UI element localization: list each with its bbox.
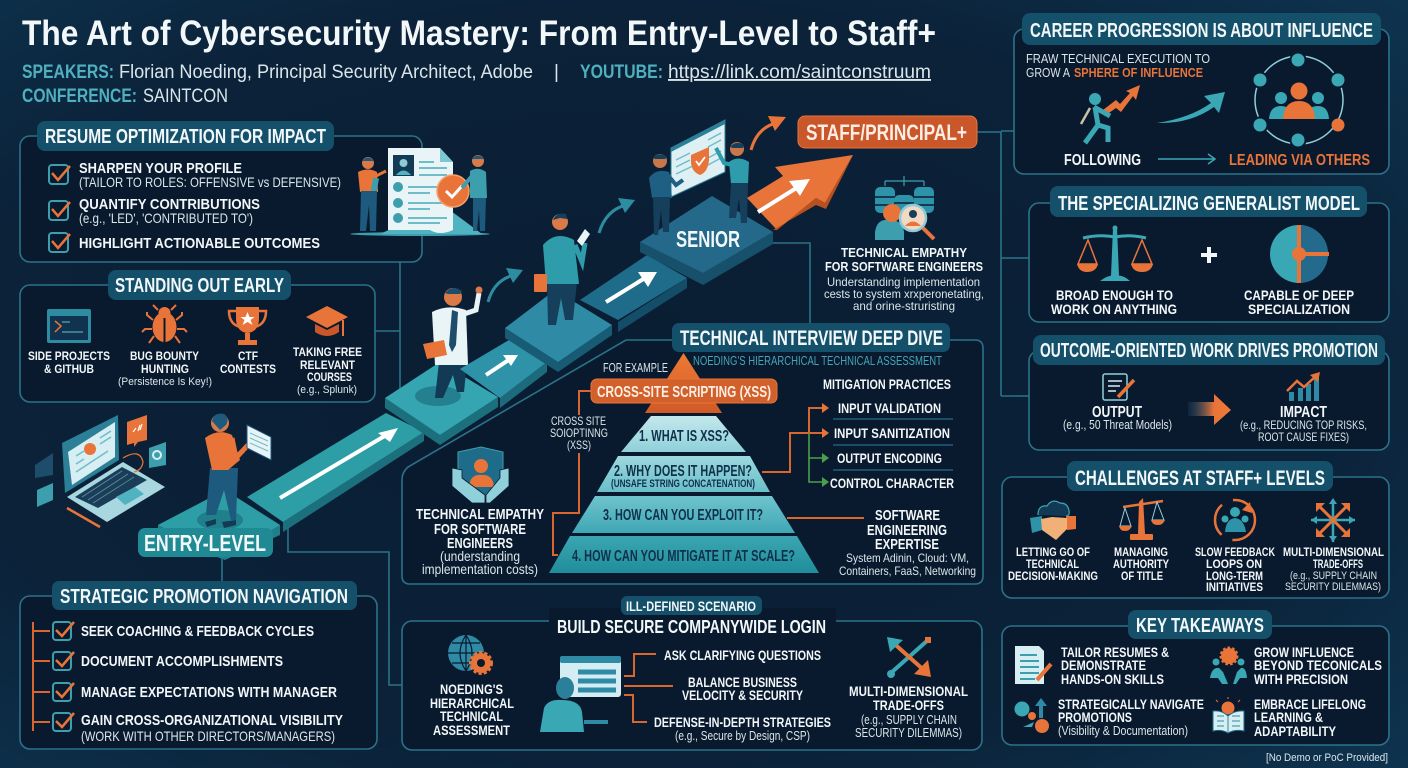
label: managing authority: MANAGING: [1114, 547, 1168, 559]
figure: engineer with tablet: [534, 214, 590, 325]
panel: challenges at staff+ levels: [1002, 461, 1389, 598]
career intro text: FRAW TECHNICAL EXECUTION TO: [1026, 51, 1210, 66]
text: output: [1063, 404, 1172, 432]
panel: key takeaways: KEY TAKEAWAYS: [1136, 615, 1264, 637]
promotion list text: (WORK WITH OTHER DIRECTORS/MANAGERS): [81, 728, 335, 744]
speakers and link line: YOUTUBE:: [580, 62, 663, 83]
label: staff/principal: [798, 116, 977, 148]
resume checklist: [49, 160, 341, 252]
text: technical empathy upper: Understanding implementation: [827, 275, 980, 289]
big orange arrow: [747, 155, 853, 230]
scenario heading: BUILD SECURE COMPANYWIDE LOGIN: [557, 617, 826, 637]
resume checklist: HIGHLIGHT ACTIONABLE OUTCOMES: [79, 235, 320, 252]
free courses label: [293, 345, 362, 396]
text: impact: IMPACT: [1280, 404, 1327, 421]
text: navigate promotions: STRATEGICALLY NAVIGATE: [1058, 696, 1204, 712]
label: managing authority: [1113, 547, 1169, 583]
label: letting go: TECHNICAL: [1026, 559, 1079, 571]
resume checklist: QUANTIFY CONTRIBUTIONS: [79, 196, 260, 213]
free courses label: (e.g., Splunk): [297, 384, 357, 396]
pyramid: (UNSAFE STRING CONCATENATION): [611, 478, 755, 490]
promotion list text: SEEK COACHING & FEEDBACK CYCLES: [81, 623, 314, 640]
pyramid: 4. HOW CAN YOU MITIGATE IT AT SCALE?: [572, 548, 795, 565]
scenario steps text: [654, 647, 831, 743]
label: managing authority: AUTHORITY: [1113, 559, 1169, 571]
icon: tilted scale: [1119, 498, 1165, 540]
text: output: OUTPUT: [1092, 404, 1142, 421]
free courses label: COURSES: [307, 370, 352, 384]
icon: climbing figure: [1081, 85, 1140, 143]
text: navigate promotions: [1058, 696, 1204, 738]
side projects label: SIDE PROJECTS: [28, 349, 110, 363]
badge: cross-site scripting: CROSS-SITE SCRIPTING (XSS): [597, 384, 771, 401]
badge: ill-defined scenario: ILL-DEFINED SCENARIO: [626, 598, 756, 614]
promotion tree connector: [33, 622, 50, 731]
panel: technical interview deep dive: [402, 323, 983, 584]
label: trade-offs: [1283, 547, 1384, 593]
text: software engineering expertise: Containers, FaaS, Networking: [839, 564, 976, 578]
pathway slab 3: [580, 255, 687, 332]
figure: engineer in white shirt: [423, 286, 482, 398]
icon: handshake with cloud: [1030, 501, 1076, 540]
ctf label: [220, 349, 276, 376]
text: lifelong learning: ADAPTABILITY: [1254, 723, 1337, 739]
title: The Art of Cybersecurity Mastery: From Entry-Level to Staff+: [22, 14, 936, 53]
speakers and link line: [22, 62, 931, 83]
text: software engineering expertise: SOFTWARE: [875, 507, 940, 524]
text: technical empathy upper: cests to system xrxperonetating,: [824, 287, 984, 301]
icon: crossing arrows: [887, 637, 931, 678]
icon: specialization circle: [1270, 225, 1329, 283]
ctf label: CONTESTS: [220, 362, 276, 376]
text: lifelong learning: [1254, 696, 1366, 739]
speakers and link line: |: [554, 62, 559, 83]
icon: terminal window: [47, 309, 91, 343]
text: grow influence: [1254, 644, 1382, 687]
panel: key takeaways: [1002, 610, 1389, 745]
scenario steps text: DEFENSE-IN-DEPTH STRATEGIES: [654, 714, 831, 730]
bug bounty label: HUNTING: [141, 362, 189, 376]
icon: resume with reviewers: [350, 148, 490, 236]
label: managing authority: OF TITLE: [1121, 571, 1163, 583]
label: trade-offs: SECURITY DILEMMAS): [1285, 581, 1381, 593]
senior platform and figures: [640, 120, 773, 285]
label: deep specialization: SPECIALIZATION: [1248, 301, 1350, 317]
arrow: output to impact: [1188, 394, 1231, 425]
text: grow influence: GROW INFLUENCE: [1254, 644, 1354, 660]
badge: cross-site scripting: [591, 379, 777, 403]
label: slow feedback: [1195, 547, 1276, 594]
panel: standing out early: [20, 270, 375, 402]
label: slow feedback: SLOW FEEDBACK: [1195, 547, 1276, 559]
text: technical empathy lower: (understanding: [440, 548, 520, 564]
panel: resume optimization: RESUME OPTIMIZATION FOR IMPACT: [45, 126, 326, 148]
career intro text: SPHERE OF INFLUENCE: [1074, 65, 1203, 80]
text: lifelong learning: LEARNING &: [1254, 709, 1323, 725]
entry-level platform and figure: [138, 414, 280, 560]
text: navigate promotions: (Visibility & Documentation): [1058, 723, 1188, 738]
career intro text: [1026, 51, 1210, 80]
icon: book and light bulb: [1213, 697, 1244, 733]
bug bounty label: BUG BOUNTY: [130, 349, 199, 363]
promotion checkboxes: [53, 622, 74, 731]
free courses label: TAKING FREE: [293, 345, 362, 359]
text: software engineering expertise: [839, 507, 976, 578]
label: letting go: LETTING GO OF: [1016, 547, 1090, 559]
mid-level platform and figure: [385, 286, 498, 445]
text: technical empathy lower: TECHNICAL EMPATHY: [416, 506, 544, 523]
conference line: SAINTCON: [143, 86, 228, 107]
pyramid: 2. WHY DOES IT HAPPEN?: [614, 463, 752, 480]
xss side note: SOIOPTINNG: [550, 426, 608, 440]
text: multi-dimensional trade-offs: [849, 683, 968, 740]
figure: senior left: [649, 154, 683, 235]
icon: resume and pencil: [1015, 646, 1051, 684]
text: impact: (e.g., REDUCING TOP RISKS,: [1240, 418, 1367, 432]
label: slow feedback: INITIATIVES: [1206, 582, 1263, 594]
xss side note: CROSS SITE: [551, 414, 606, 428]
label: letting go: [1008, 547, 1098, 583]
mitigation practices list: CONTROL CHARACTER: [830, 475, 954, 491]
software engineering connector: [787, 517, 864, 519]
icon: bug: [142, 305, 187, 343]
panel: ill-defined scenario: [402, 596, 982, 750]
icon: trophy: [229, 307, 266, 345]
text: noeding's assessment: ASSESSMENT: [433, 722, 510, 738]
plus sign: [1201, 247, 1217, 263]
senior-track platform and figure: [505, 214, 612, 372]
text: multi-dimensional trade-offs: SECURITY DILEMMAS): [855, 725, 962, 740]
icon: globe with gear: [448, 635, 491, 673]
label: senior: SENIOR: [676, 226, 740, 252]
text: multi-dimensional trade-offs: MULTI-DIMENSIONAL: [849, 683, 968, 699]
text: noeding's assessment: HIERARCHICAL: [430, 695, 514, 711]
icon: person at login screen: [540, 656, 621, 732]
scenario steps text: ASK CLARIFYING QUESTIONS: [664, 647, 821, 663]
scenario steps text: (e.g., Secure by Design, CSP): [675, 728, 810, 743]
icon: database and engineer magnified: [875, 176, 934, 240]
panel: specializing generalist: [1029, 186, 1389, 322]
footnote: [No Demo or PoC Provided]: [1266, 752, 1388, 764]
label: trade-offs: TRADE-OFFS: [1313, 559, 1363, 571]
speakers and link line: SPEAKERS:: [22, 62, 114, 83]
text: technical empathy lower: implementation costs): [422, 561, 538, 577]
figure: senior right: [716, 142, 749, 223]
promotion list text: GAIN CROSS-ORGANIZATIONAL VISIBILITY: [81, 712, 343, 729]
icon: output document: [1103, 374, 1134, 400]
label: for example: FOR EXAMPLE: [603, 360, 668, 375]
xss side note: (XSS): [567, 438, 591, 452]
pyramid: [549, 353, 819, 573]
text: tailor resumes: HANDS-ON SKILLS: [1061, 671, 1164, 687]
label: deep specialization: CAPABLE OF DEEP: [1244, 287, 1354, 303]
scenario steps text: BALANCE BUSINESS: [688, 674, 797, 690]
text: software engineering expertise: ENGINEERING: [867, 522, 947, 539]
text: technical empathy upper: and orine-struristing: [853, 299, 955, 313]
icon: money and growth: [1014, 698, 1049, 733]
text: output: (e.g., 50 Threat Models): [1063, 417, 1172, 432]
label: broad enough: [1051, 287, 1177, 317]
panel: outcome-oriented work: [1029, 335, 1389, 450]
icon: feedback cycle: [1215, 500, 1255, 540]
text: technical empathy upper: [824, 245, 984, 313]
label: broad enough: BROAD ENOUGH TO: [1056, 287, 1173, 303]
mitigation practices list: OUTPUT ENCODING: [837, 450, 942, 466]
icon: multi-direction arrows: [1311, 498, 1355, 542]
big teal arrow: [1157, 92, 1225, 123]
label: entry-level: ENTRY-LEVEL: [144, 530, 266, 556]
text: noeding's assessment: NOEDING'S: [440, 681, 503, 697]
figure: entry-level engineer: [205, 414, 271, 528]
mitigation practices list: INPUT VALIDATION: [838, 400, 941, 416]
panel: career progression: [1014, 13, 1389, 174]
text: technical empathy upper: FOR SOFTWARE ENGINEERS: [825, 259, 983, 274]
pyramid: 1. WHAT IS XSS?: [639, 428, 729, 445]
label: leading via others: LEADING VIA OTHERS: [1229, 152, 1370, 169]
text: noeding's assessment: [430, 681, 514, 738]
panel: technical interview deep dive: TECHNICAL INTERVIEW DEEP DIVE: [680, 327, 943, 350]
icon: sphere of influence: [1254, 54, 1344, 146]
text: technical empathy lower: [416, 506, 544, 577]
text: tailor resumes: DEMONSTRATE: [1061, 657, 1146, 673]
label: slow feedback: LONG-TERM: [1206, 571, 1263, 583]
career intro text: GROW A: [1026, 65, 1070, 80]
bug bounty label: [118, 349, 212, 388]
conference line: [22, 86, 228, 107]
pyramid left connector: [553, 391, 591, 555]
board with shield: [671, 120, 725, 197]
side projects label: [28, 349, 110, 376]
scenario steps text: VELOCITY & SECURITY: [682, 687, 803, 703]
panel: standing out early: STANDING OUT EARLY: [115, 275, 284, 297]
badge: ill-defined scenario: [621, 596, 762, 615]
panel: strategic promotion navigation: STRATEGIC PROMOTION NAVIGATION: [60, 586, 348, 608]
scenario connectors: [624, 654, 673, 722]
conference line: CONFERENCE:: [22, 86, 137, 107]
text: noeding's assessment: TECHNICAL: [440, 708, 503, 724]
growth arrows: [488, 116, 786, 302]
mitigation practices list: INPUT SANITIZATION: [834, 425, 950, 441]
text: multi-dimensional trade-offs: (e.g., SUPPLY CHAIN: [861, 712, 957, 727]
text: impact: [1240, 404, 1367, 444]
label: trade-offs: MULTI-DIMENSIONAL: [1283, 547, 1384, 559]
mitigation practices list: [823, 376, 954, 491]
text: navigate promotions: PROMOTIONS: [1058, 709, 1132, 725]
label: staff/principal: STAFF/PRINCIPAL+: [806, 120, 967, 145]
text: software engineering expertise: EXPERTISE: [875, 536, 939, 553]
promotion list text: DOCUMENT ACCOMPLISHMENTS: [81, 653, 283, 670]
text: tailor resumes: TAILOR RESUMES &: [1061, 644, 1169, 660]
speakers and link line: https://link.com/saintconstruum: [668, 62, 931, 83]
icon: graduation cap: [306, 306, 348, 336]
label: letting go: DECISION-MAKING: [1008, 571, 1098, 583]
mitigation arrows: [762, 403, 829, 487]
text: grow influence: BEYOND TECONICALS: [1254, 657, 1382, 673]
text: lifelong learning: EMBRACE LIFELONG: [1254, 696, 1366, 712]
resume checklist: (TAILOR TO ROLES: OFFENSIVE vs DEFENSIVE): [79, 174, 341, 190]
label: following: FOLLOWING: [1064, 152, 1141, 169]
side projects label: & GITHUB: [44, 362, 94, 376]
text: tailor resumes: [1061, 644, 1169, 687]
icon: balance scale: [1077, 226, 1153, 281]
icon: laptop illustration: [35, 415, 166, 527]
label: slow feedback: LOOPS ON: [1206, 559, 1262, 571]
icon: people and gear: [1210, 648, 1247, 684]
text: grow influence: WITH PRECISION: [1254, 671, 1348, 687]
promotion list text: [81, 623, 343, 744]
resume checklist: (e.g., 'LED', 'CONTRIBUTED TO'): [79, 210, 253, 226]
pyramid: 3. HOW CAN YOU EXPLOIT IT?: [603, 507, 763, 524]
text: multi-dimensional trade-offs: TRADE-OFFS: [873, 697, 944, 713]
text: software engineering expertise: System Adinin, Cloud: VM,: [846, 551, 969, 565]
label: broad enough: WORK ON ANYTHING: [1051, 301, 1177, 317]
speakers and link line: Florian Noeding, Principal Security Architect, Adobe: [119, 62, 533, 83]
text: technical empathy upper: TECHNICAL EMPATHY: [841, 245, 967, 260]
icon: impact chart: [1287, 372, 1320, 401]
label: trade-offs: (e.g., SUPPLY CHAIN: [1290, 570, 1377, 582]
bug bounty label: (Persistence Is Key!): [118, 376, 212, 388]
resume checklist: SHARPEN YOUR PROFILE: [79, 160, 242, 177]
promotion list text: MANAGE EXPECTATIONS WITH MANAGER: [81, 684, 337, 701]
pathway slab 1: [247, 413, 424, 532]
subtitle: NOEDING'S HIERARCHICAL TECHNICAL ASSESSMENT: [693, 353, 942, 368]
label: deep specialization: [1244, 287, 1354, 317]
icon: shield with hands: [452, 447, 509, 503]
panel: resume optimization: [20, 121, 490, 262]
panel: strategic promotion navigation: [20, 581, 377, 749]
pathway slab 2: [460, 340, 547, 408]
text: technical empathy lower: ENGINEERS: [447, 535, 513, 552]
connector lines: [222, 131, 1029, 685]
ctf label: CTF: [238, 349, 258, 363]
free courses label: RELEVANT: [300, 358, 356, 372]
xss side note: [550, 414, 608, 452]
mitigation practices list: MITIGATION PRACTICES: [823, 376, 951, 392]
text: impact: ROOT CAUSE FIXES): [1258, 430, 1349, 444]
arrow: following to leading: [1158, 154, 1215, 164]
text: technical empathy lower: FOR SOFTWARE: [434, 521, 526, 538]
